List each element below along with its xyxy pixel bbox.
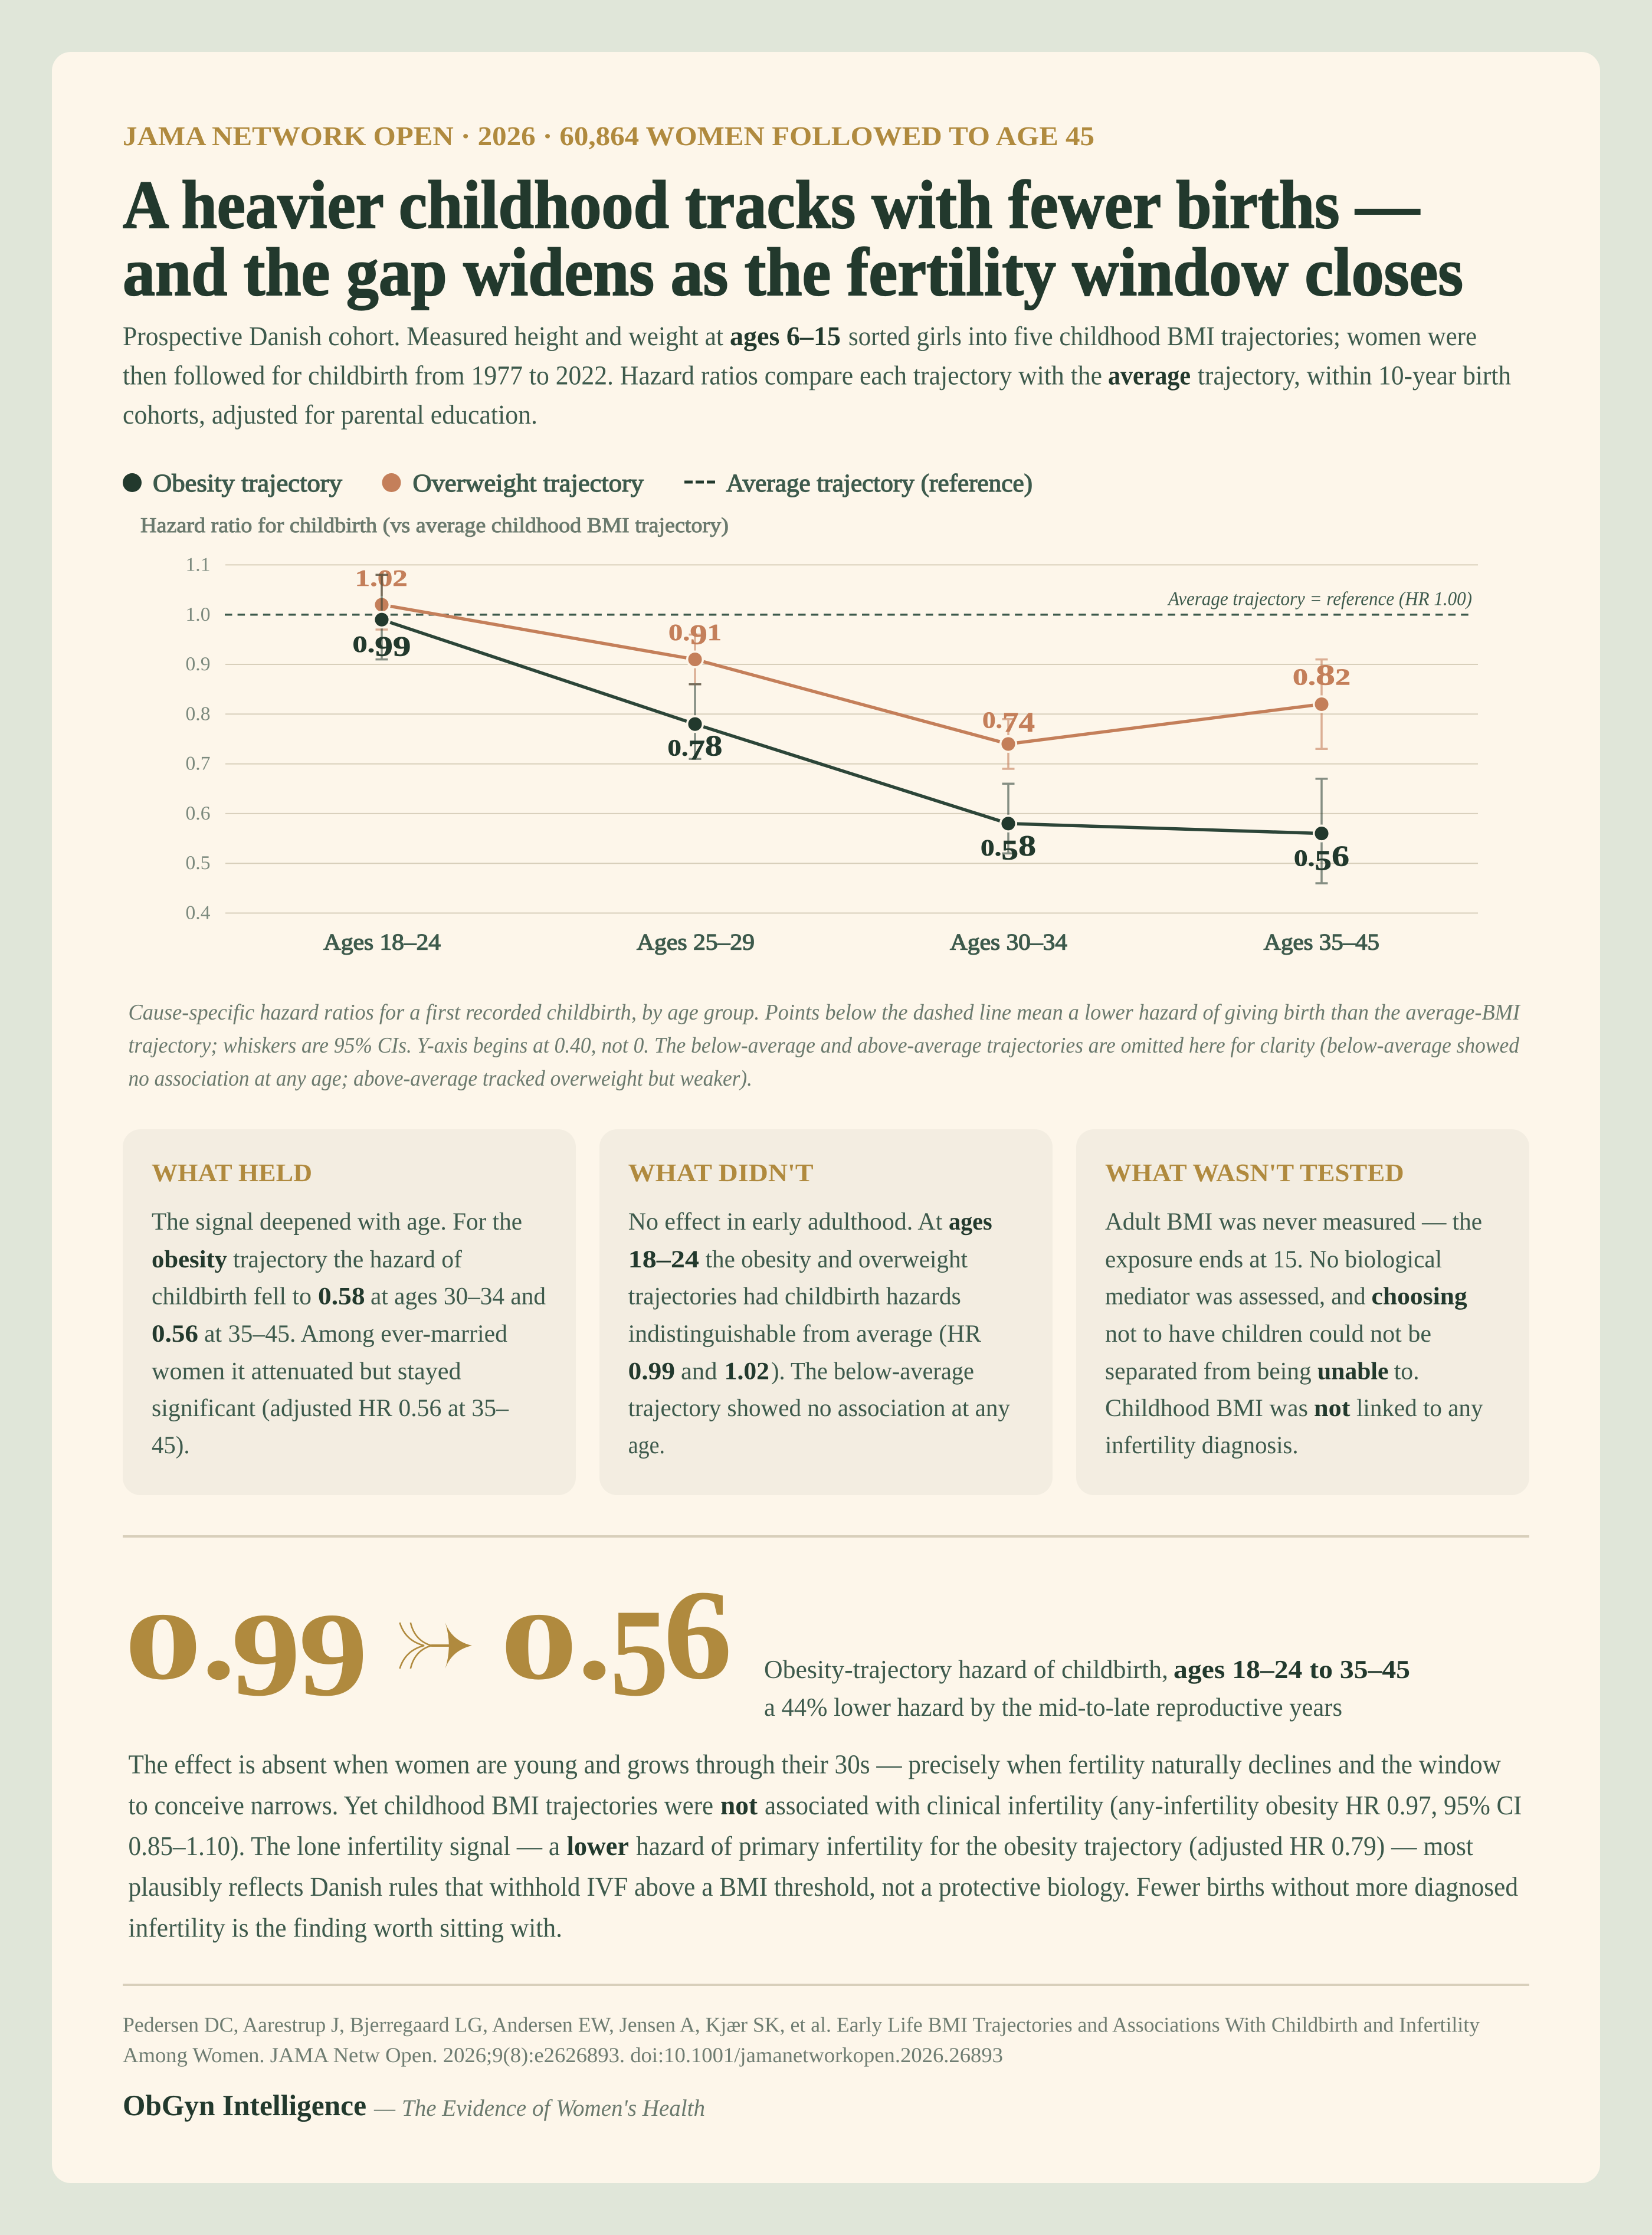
body: what held: women it attenuated but stayed — [152, 1358, 461, 1385]
obesity line — [382, 620, 1322, 834]
overweight points — [374, 597, 1329, 752]
overweight value labels: 9 — [690, 620, 707, 650]
reference line — [225, 614, 1473, 615]
heading: what wasn't tested: WHAT WASN'T TESTED — [1105, 1159, 1404, 1187]
obesity value labels: 5 — [1315, 845, 1332, 876]
citation: Pedersen DC, Aarestrup J, Bjerregaard LG, Andersen EW, Jensen A, Kjær SK, et al. Early Life BMI Trajectories and Associations With Childbirth and Infertility — [123, 2013, 1480, 2037]
body: what wasn't tested: not to have children could not be — [1105, 1320, 1431, 1348]
y axis labels — [185, 555, 210, 924]
big number caption: ages 18–24 to 35–45 — [1174, 1655, 1410, 1684]
big number: 0.99 to 0.56: 5 — [610, 1584, 669, 1722]
body: what wasn't tested: Adult BMI was never measured — the — [1105, 1208, 1482, 1236]
interpretation paragraph — [129, 1749, 1522, 1942]
chart title: Hazard ratio for childbirth (vs average childhood BMI trajectory) — [140, 513, 729, 537]
body: what wasn't tested — [1105, 1208, 1483, 1459]
big number caption: a 44% lower hazard by the mid-to-late reproductive years — [764, 1693, 1342, 1722]
overweight value labels: 74 — [1002, 707, 1035, 738]
y axis labels: 0.8 — [185, 703, 210, 725]
brand footer: The Evidence of Women's Health — [402, 2095, 705, 2121]
big number: 0.99 to 0.56: . — [577, 1572, 611, 1705]
interpretation paragraph: infertility is the finding worth sitting with. — [129, 1912, 562, 1942]
overweight value labels: 1.02 — [355, 565, 408, 591]
chart note: trajectory; whiskers are 95% CIs. Y-axis begins at 0.40, not 0. The below-average and above-average trajectories are omitted here for clarity (below-average showed — [129, 1033, 1520, 1058]
panel: what held — [123, 1129, 576, 1495]
big number: 0.99 to 0.56: . — [202, 1572, 235, 1705]
title: and the gap widens as the fertility window closes — [123, 235, 1463, 310]
body: what didn't — [628, 1208, 1010, 1459]
y axis labels: 0.4 — [185, 903, 210, 924]
big number caption — [764, 1655, 1410, 1722]
interpretation paragraph: hazard of primary infertility for the obesity trajectory (adjusted HR 0.79) — most — [636, 1831, 1473, 1861]
body: what wasn't tested: unable — [1317, 1358, 1389, 1385]
body: what didn't: ). The below-average — [771, 1358, 974, 1385]
brand footer — [123, 2089, 705, 2122]
citation — [123, 2013, 1480, 2067]
body: what held: at 35–45. Among ever-married — [204, 1320, 507, 1348]
big number: 0.99 to 0.56: 6 — [663, 1564, 732, 1706]
body: what didn't: indistinguishable from average (HR — [628, 1320, 981, 1348]
obesity value labels: 8 — [705, 729, 722, 762]
x axis labels: Ages 30–34 — [950, 930, 1067, 955]
intro text: ages 6–15 — [730, 321, 841, 352]
intro text: then followed for childbirth from 1977 to 2022. Hazard ratios compare each trajectory with the — [123, 360, 1102, 391]
y axis labels: 1.0 — [185, 604, 210, 625]
big number caption: Obesity-trajectory hazard of childbirth, — [764, 1655, 1168, 1684]
body: what held: 0.58 — [318, 1283, 365, 1310]
y axis labels: 0.7 — [185, 753, 210, 774]
panel: what wasn't tested — [1076, 1129, 1529, 1495]
obesity value labels: 5 — [1001, 834, 1018, 866]
big number: 0.99 to 0.56: 9 — [299, 1588, 368, 1721]
title: A heavier childhood tracks with fewer births — — [123, 168, 1420, 243]
obesity value labels: 99 — [375, 631, 411, 662]
body: what held: The signal deepened with age. For the — [152, 1208, 522, 1236]
body: what didn't: trajectory showed no association at any — [628, 1395, 1010, 1422]
obesity value labels: 8 — [1018, 829, 1036, 862]
body: what held: 0.56 — [152, 1320, 198, 1348]
legend — [123, 470, 1032, 497]
body: what held: childbirth fell to — [152, 1283, 312, 1310]
body: what didn't: 0.99 — [628, 1358, 675, 1385]
body: what held: significant (adjusted HR 0.56 at 35– — [152, 1395, 509, 1422]
x axis labels: Ages 35–45 — [1264, 930, 1379, 955]
obesity value labels: 7 — [689, 735, 705, 766]
body: what didn't: and — [681, 1358, 717, 1385]
intro text: trajectory, within 10-year birth — [1198, 360, 1511, 391]
eyebrow: JAMA NETWORK OPEN · 2026 · 60,864 WOMEN FOLLOWED TO AGE 45 — [123, 121, 1094, 151]
body: what wasn't tested: infertility diagnosis. — [1105, 1432, 1298, 1459]
obesity value labels: 0. — [668, 735, 685, 761]
overweight value labels: 0. — [668, 620, 686, 645]
chart note — [129, 1000, 1521, 1091]
y axis labels: 0.6 — [185, 803, 210, 824]
overweight value labels: 1 — [707, 620, 722, 645]
y axis labels: 0.9 — [185, 654, 210, 675]
body: what didn't: the obesity and overweight — [706, 1246, 968, 1273]
intro text: sorted girls into five childhood BMI trajectories; women were — [848, 321, 1477, 351]
body: what held: at ages 30–34 and — [371, 1283, 546, 1310]
reference line label: Average trajectory = reference (HR 1.00) — [1167, 589, 1472, 610]
overweight value labels: 0.82 — [1293, 658, 1351, 692]
legend: Overweight trajectory — [413, 470, 644, 497]
intro text: average — [1108, 360, 1191, 391]
interpretation paragraph: 0.85–1.10). The lone infertility signal — a — [129, 1831, 560, 1861]
interpretation paragraph: to conceive narrows. Yet childhood BMI trajectories were — [129, 1790, 713, 1820]
x axis labels: Ages 25–29 — [637, 930, 755, 955]
body: what didn't: 1.02 — [725, 1358, 769, 1385]
body: what didn't: ages — [949, 1208, 992, 1236]
x axis labels — [323, 930, 1379, 955]
interpretation paragraph: lower — [567, 1831, 629, 1861]
citation: Among Women. JAMA Netw Open. 2026;9(8):e2626893. doi:10.1001/jamanetworkopen.2026.26893 — [123, 2043, 1003, 2067]
body: what didn't: age. — [628, 1432, 665, 1459]
y axis labels: 0.5 — [185, 853, 210, 874]
legend: Obesity trajectory — [153, 470, 343, 497]
big number: 0.99 to 0.56: 9 — [231, 1588, 300, 1721]
body: what wasn't tested: choosing — [1371, 1283, 1467, 1310]
interpretation paragraph: not — [720, 1790, 758, 1820]
intro text: Prospective Danish cohort. Measured height and weight at — [123, 321, 723, 351]
brand footer: ObGyn Intelligence — [123, 2089, 366, 2122]
obesity whiskers — [375, 575, 1328, 883]
overweight whiskers — [375, 575, 1328, 769]
body: what didn't: 18–24 — [628, 1246, 699, 1273]
overweight value labels: 0. — [982, 707, 1000, 733]
title — [123, 168, 1463, 310]
panel: what didn't — [599, 1129, 1053, 1495]
body: what wasn't tested: linked to any — [1356, 1395, 1483, 1422]
obesity value labels: 0. — [981, 835, 998, 861]
obesity points — [374, 612, 1329, 841]
legend: Average trajectory (reference) — [726, 470, 1032, 497]
body: what wasn't tested: exposure ends at 15. No biological — [1105, 1246, 1442, 1273]
interpretation paragraph: plausibly reflects Danish rules that withhold IVF above a BMI threshold, not a protective biology. Fewer births without more diagnosed — [129, 1872, 1518, 1902]
obesity value labels: 6 — [1332, 840, 1349, 873]
body: what held: obesity — [152, 1246, 227, 1273]
obesity value labels: 0. — [1294, 846, 1312, 871]
heading: what held: WHAT HELD — [152, 1159, 312, 1187]
big number: 0.99 to 0.56 — [124, 1564, 732, 1722]
body: what wasn't tested: Childhood BMI was — [1105, 1395, 1308, 1422]
body: what wasn't tested: to. — [1394, 1358, 1420, 1385]
brand footer: — — [373, 2095, 396, 2121]
icon: arrow — [400, 1623, 472, 1669]
body: what wasn't tested: mediator was assessed, and — [1105, 1283, 1365, 1310]
intro text: cohorts, adjusted for parental education. — [123, 399, 537, 430]
obesity value labels — [353, 631, 1349, 876]
body: what didn't: trajectories had childbirth hazards — [628, 1283, 961, 1310]
y axis labels: 1.1 — [185, 555, 210, 576]
line chart: hazard ratios — [185, 555, 1478, 955]
big number: 0.99 to 0.56: 0 — [124, 1593, 202, 1700]
chart note: no association at any age; above-average tracked overweight but weaker). — [129, 1066, 752, 1091]
body: what didn't: No effect in early adulthood. At — [628, 1208, 943, 1236]
big number: 0.99 to 0.56: 0 — [500, 1593, 578, 1700]
body: what wasn't tested: separated from being — [1105, 1358, 1312, 1385]
body: what held: trajectory the hazard of — [233, 1246, 462, 1273]
interpretation paragraph: The effect is absent when women are young and grows through their 30s — precisely when fertility naturally declines and the window — [129, 1749, 1502, 1780]
body: what held: 45). — [152, 1432, 190, 1459]
x axis labels: Ages 18–24 — [323, 930, 441, 955]
chart note: Cause-specific hazard ratios for a first recorded childbirth, by age group. Points below the dashed line mean a lower hazard of giving birth than the average-BMI — [129, 1000, 1521, 1025]
overweight line — [382, 605, 1322, 744]
heading: what didn't: WHAT DIDN'T — [628, 1159, 814, 1187]
interpretation paragraph: associated with clinical infertility (any-infertility obesity HR 0.97, 95% CI — [765, 1790, 1522, 1820]
intro text — [123, 321, 1511, 430]
body: what held — [152, 1208, 546, 1459]
body: what wasn't tested: not — [1314, 1395, 1350, 1422]
overweight value labels — [355, 565, 1351, 738]
obesity value labels: 0. — [353, 631, 370, 657]
